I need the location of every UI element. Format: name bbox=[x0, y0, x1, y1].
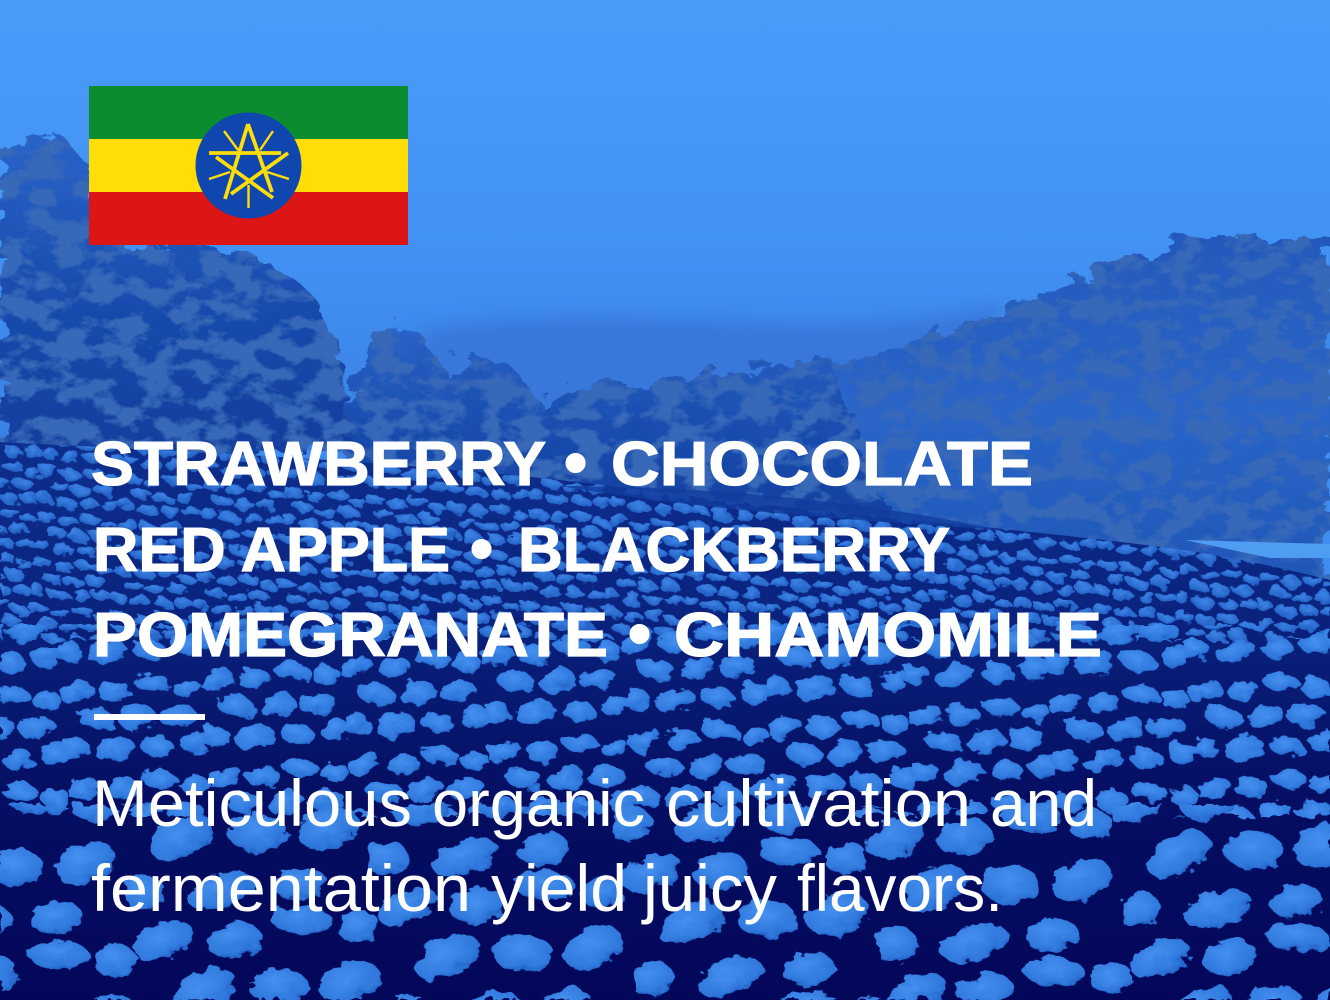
mid treeline bbox=[340, 321, 900, 540]
description text: organic bbox=[432, 766, 645, 840]
description text: Meticulous bbox=[92, 766, 412, 840]
pale water strip bbox=[1185, 540, 1330, 558]
flag of Ethiopia bbox=[89, 86, 408, 245]
description text: cultivation bbox=[666, 766, 971, 840]
headline: flavor notes: • bbox=[564, 425, 587, 499]
description text bbox=[91, 766, 1097, 925]
description text: and bbox=[990, 766, 1097, 840]
description text: fermentation bbox=[91, 851, 471, 925]
headline: flavor notes: CHAMOMILE bbox=[674, 601, 1102, 670]
headline: flavor notes: BLACKBERRY bbox=[518, 516, 950, 585]
sky bbox=[0, 0, 1330, 450]
divider rule bbox=[94, 714, 205, 720]
headline: flavor notes: STRAWBERRY bbox=[91, 430, 546, 499]
headline: flavor notes: RED APPLE bbox=[93, 516, 450, 585]
distant mountains bbox=[420, 305, 1000, 430]
dark shadow band on path bbox=[560, 486, 1000, 530]
headline: flavor notes: POMEGRANATE bbox=[93, 601, 608, 670]
headline: flavor notes bbox=[91, 425, 1102, 670]
headline: flavor notes: • bbox=[628, 596, 651, 670]
headline: flavor notes: CHOCOLATE bbox=[611, 430, 1033, 499]
flag emblem: blue disc with star bbox=[196, 112, 302, 218]
right hillside bbox=[800, 235, 1330, 590]
headline: flavor notes: • bbox=[470, 511, 493, 585]
left trees bbox=[0, 135, 360, 460]
description text: juicy bbox=[641, 851, 777, 925]
description text: flavors. bbox=[797, 851, 1003, 925]
description text: yield bbox=[491, 851, 627, 925]
bean beds ground bbox=[0, 430, 1330, 1000]
